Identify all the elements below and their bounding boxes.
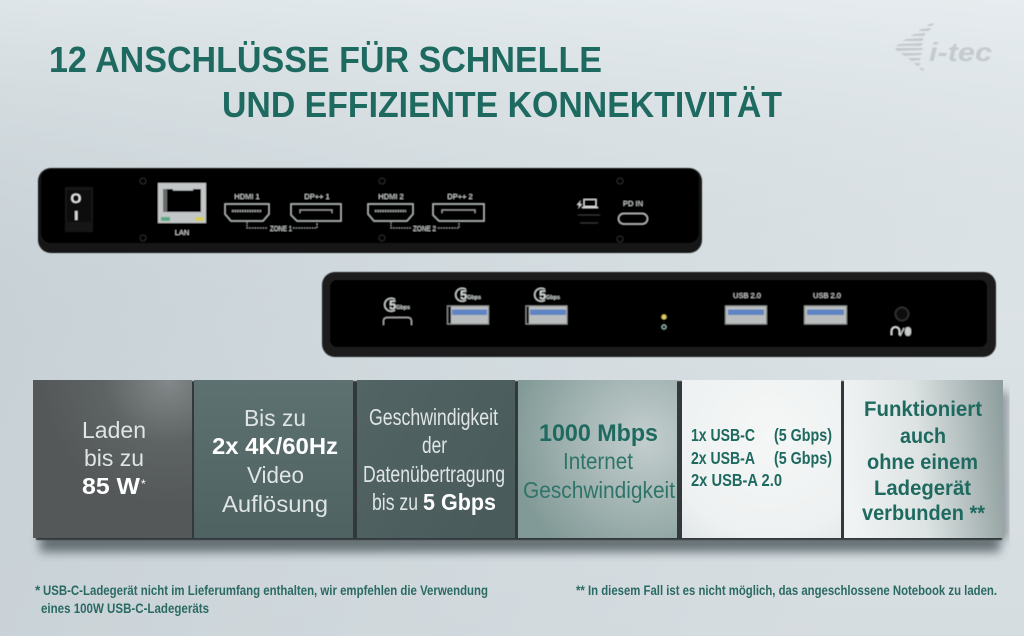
- DP++ 2: DP++ 2: [447, 192, 473, 201]
- panel: data speed: Geschwindigkeit: [369, 404, 498, 430]
- HDMI 1: [225, 192, 269, 221]
- zone 1 bracket: ZONE 1: [270, 224, 292, 233]
- logo: i-tec: i-tec: [929, 37, 993, 67]
- dock: rear view: [38, 168, 702, 253]
- panel: no charger: Ladegerät: [874, 477, 971, 500]
- USB 2.0 port 1: USB 2.0: [733, 291, 761, 300]
- panel: charging: Laden: [82, 417, 146, 443]
- panel: no charger: ohne einem: [867, 451, 978, 474]
- title: UND EFFIZIENTE KONNEKTIVITÄT: [222, 84, 782, 125]
- PD IN USB-C port: [618, 199, 648, 224]
- footnote: charger: eines 100W USB-C-Ladegeräts: [41, 601, 209, 616]
- USB-C 5 Gbps port: [384, 298, 412, 325]
- USB-A 5 Gbps port 1: [448, 288, 488, 324]
- footnote: charger: [35, 583, 488, 616]
- panel: USB ports: [682, 380, 841, 538]
- zone 2 bracket: ZONE 2: [413, 224, 436, 233]
- power switch: [65, 187, 93, 232]
- logo: i-tec: [895, 23, 993, 71]
- panel: no charger: Funktioniert: [864, 398, 982, 421]
- panel: data speed: bis zu: [372, 489, 418, 515]
- panel: video: Bis zu: [244, 405, 306, 431]
- panel: data speed: [357, 380, 515, 538]
- panel: data speed: 5 Gbps: [423, 489, 496, 515]
- icon: laptop charging: [577, 200, 600, 223]
- USB-A 5 Gbps port 1: Gbps: [467, 295, 481, 301]
- panel: charging: 85 W: [82, 473, 140, 499]
- USB-C 5 Gbps port: 5: [389, 298, 396, 312]
- panel: no charger: verbunden **: [862, 502, 986, 525]
- panel: no charger: auch: [900, 425, 946, 448]
- DP++ 2: [433, 192, 484, 221]
- DP++ 1: [291, 192, 341, 221]
- zone 1 bracket: [247, 222, 317, 233]
- panel: USB ports: (5 Gbps): [774, 425, 832, 445]
- panel: data speed: Datenübertragung: [363, 461, 505, 487]
- HDMI 2: [368, 192, 413, 221]
- panel: no charger: [844, 380, 1003, 538]
- HDMI 2: HDMI 2: [378, 192, 404, 201]
- USB-A 5 Gbps port 1: 5: [460, 288, 467, 302]
- title: [49, 39, 782, 125]
- audio jack: [892, 308, 911, 336]
- panel: internet speed: 1000 Mbps: [539, 420, 658, 447]
- title: 12 ANSCHLÜSSE FÜR SCHNELLE: [49, 39, 602, 80]
- screws: [140, 178, 623, 242]
- panel: USB ports: 1x USB-C: [691, 425, 755, 445]
- panel shadow: [36, 381, 1008, 552]
- PD IN USB-C port: PD IN: [623, 199, 643, 208]
- panel: video: Auflösung: [222, 491, 328, 517]
- USB 2.0 port 1: [726, 291, 766, 324]
- panel: data speed: der: [422, 432, 447, 458]
- LAN port: [158, 183, 206, 237]
- panel: charging: [33, 380, 192, 538]
- USB-C 5 Gbps port: Gbps: [396, 305, 410, 311]
- status LEDs: [662, 314, 666, 329]
- zone 2 bracket: [391, 222, 459, 233]
- USB 2.0 port 2: [804, 291, 846, 324]
- USB-A 5 Gbps port 2: 5: [539, 288, 546, 302]
- panel: USB ports: 2x USB-A 2.0: [691, 470, 782, 490]
- USB-A 5 Gbps port 2: Gbps: [546, 295, 560, 301]
- footnote: charger: *: [35, 583, 41, 598]
- panel: charging: bis zu: [84, 445, 144, 471]
- panel: video: [194, 380, 353, 538]
- LAN port: LAN: [175, 228, 189, 237]
- footnote: charger: USB-C-Ladegerät nicht im Lieferumfang enthalten, wir empfehlen die Verwendung: [43, 583, 488, 598]
- panel: video: Video: [247, 462, 304, 488]
- DP++ 1: DP++ 1: [304, 192, 330, 201]
- panel: USB ports: (5 Gbps): [774, 448, 832, 468]
- HDMI 1: HDMI 1: [234, 192, 260, 201]
- panel: video: 2x 4K/60Hz: [212, 433, 338, 459]
- panel: internet speed: Internet: [563, 448, 634, 474]
- panel: internet speed: Geschwindigkeit: [523, 477, 676, 503]
- panel: internet speed: [518, 380, 677, 538]
- USB 2.0 port 2: USB 2.0: [813, 291, 841, 300]
- power switch: O: [71, 190, 82, 206]
- panel: charging: *: [141, 477, 146, 491]
- USB-A 5 Gbps port 2: [526, 288, 567, 324]
- panel: USB ports: 2x USB-A: [691, 448, 755, 468]
- dock: front view: [322, 272, 996, 357]
